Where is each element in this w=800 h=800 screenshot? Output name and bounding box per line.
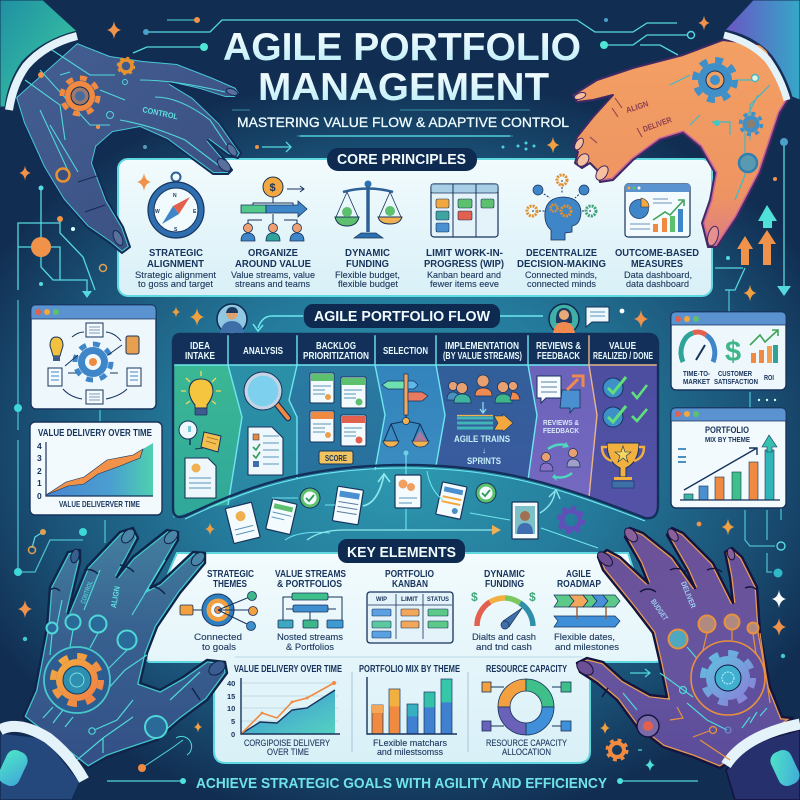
flow columns: [173, 334, 658, 518]
icon: organize around value: $: [270, 182, 276, 194]
text: limit wip: Kanban beard and: [427, 270, 501, 281]
circuit traces: [43, 560, 200, 760]
icons: reviews and feedback: REVIEWS &: [543, 418, 579, 427]
hand shape: [577, 528, 793, 768]
text: limit wip: LIMIT WORK-IN-: [426, 247, 503, 259]
icon: compass: S: [174, 227, 178, 233]
text: strategic alignment: STRATEGIC: [149, 247, 203, 259]
chart: resource capacity donut: [482, 663, 571, 758]
window: kpi metrics: MARKET: [683, 377, 710, 386]
window: value delivery chart: 4: [37, 441, 42, 451]
chart: resource capacity donut: RESOURCE CAPACITY: [486, 663, 567, 675]
hand outline: [23, 528, 227, 768]
icon: kanban board: [431, 184, 498, 237]
text: organize around value: ORGANIZE: [248, 247, 298, 259]
text: strategic alignment: [135, 247, 216, 290]
speech bubble: [586, 307, 624, 327]
icons: value realized: [602, 377, 647, 488]
text: decentralize: Connected minds,: [525, 270, 597, 281]
window: kpi metrics: TIME-TO-: [683, 369, 710, 378]
column header labels: PRIORITIZATION: [303, 350, 369, 362]
text: limit wip: fewer items eeve: [430, 279, 499, 290]
key element: value streams: Nosted streams: [277, 632, 343, 643]
teal rim: [23, 528, 227, 768]
text: dynamic funding: flexible budget: [338, 279, 398, 290]
key element: agile roadmap: ROADMAP: [557, 578, 601, 590]
key element: agile roadmap: [554, 568, 620, 653]
finger rings: [698, 614, 758, 634]
key element: dynamic funding gauge: FUNDING: [485, 578, 524, 590]
panel: core principles: [118, 159, 712, 296]
panel background: [147, 553, 660, 763]
text: decentralize: [517, 247, 606, 290]
text: organize around value: Value streams, value: [231, 270, 315, 281]
hand label: align: ALIGN: [109, 585, 122, 609]
circuit traces: [623, 647, 767, 730]
window: value delivery chart: 1: [37, 478, 42, 488]
icon: outcome dashboard: [625, 184, 690, 237]
heading: agile portfolio flow: [304, 304, 500, 328]
ring: index: [668, 630, 688, 648]
column header labels: INTAKE: [185, 350, 215, 362]
chart: resource capacity donut: RESOURCE CAPACITY: [486, 738, 568, 749]
icons: idea intake: [179, 371, 221, 498]
orange and violet rim: [577, 528, 793, 768]
hand: top right: [573, 0, 800, 247]
icons: analysis: [244, 372, 288, 475]
avatar: man: [217, 304, 247, 334]
text: decentralize: connected minds: [527, 279, 596, 290]
wrist ring: [739, 154, 757, 172]
window: portfolio mix: PORTFOLIO: [705, 425, 749, 436]
text: outcome-based: data dashboard: [626, 279, 689, 290]
window: kpi metrics: [671, 312, 786, 390]
icons: selection signpost and scales: [382, 374, 429, 530]
icons: backlog cards: [310, 373, 366, 464]
text: outcome-based: MEASURES: [631, 258, 683, 270]
hand shape: [573, 40, 790, 247]
key element: strategic themes: to goals: [202, 642, 236, 653]
key element: portfolio kanban: LIMIT: [401, 596, 418, 603]
text: outcome-based: OUTCOME-BASED: [615, 247, 699, 259]
hand: bottom right: [574, 526, 800, 800]
wrist ring: [56, 168, 70, 182]
icon: compass: W: [155, 209, 160, 215]
text: outcome-based: [615, 247, 699, 290]
hand label: deliver: DELIVER: [679, 580, 698, 610]
cuff: [0, 726, 84, 780]
panel background: [118, 159, 712, 296]
text: strategic alignment: to goss and target: [138, 279, 213, 290]
window: value flow diagram: [31, 305, 156, 409]
heading: core principles: CORE PRINCIPLES: [337, 152, 466, 168]
key element: portfolio kanban: KANBAN: [392, 578, 428, 590]
subtitle: MASTERING VALUE FLOW & ADAPTIVE CONTROL: [237, 114, 569, 130]
window: portfolio mix: MIX BY THEME: [705, 435, 750, 444]
title: AGILE PORTFOLIO: [223, 26, 581, 69]
icon: organize around value: [241, 177, 307, 241]
hand label: deliver: DELIVER: [642, 115, 673, 134]
icon: small blue gear: [740, 114, 762, 134]
heading: core principles: [327, 148, 477, 171]
chart: value delivery over time: CORGIPOISE DELIVERY: [244, 738, 331, 749]
text: organize around value: AROUND VALUE: [235, 258, 311, 270]
chart: value delivery over time: VALUE DELIVERY OVER TIME: [234, 663, 342, 675]
text: dynamic funding: DYNAMIC: [345, 247, 390, 259]
text: decentralize: DECISION-MAKING: [517, 258, 606, 270]
chart: value delivery over time: 5: [231, 717, 235, 726]
heading: key elements: KEY ELEMENTS: [347, 544, 456, 561]
hand outline: [15, 42, 241, 253]
key element: value streams: VALUE STREAMS: [275, 568, 346, 580]
avatar: woman: [549, 304, 579, 334]
icons: reviews and feedback: FEEDBACK: [543, 426, 580, 435]
sleeve: [726, 730, 800, 800]
hand outline: [577, 528, 793, 768]
title: [223, 26, 581, 109]
key element: dynamic funding gauge: $: [471, 590, 478, 604]
sleeve glow: [0, 747, 31, 789]
sleeve: [725, 0, 800, 100]
column header labels: VALUE: [609, 340, 636, 352]
hand: bottom left: [0, 527, 228, 800]
column header labels: SELECTION: [383, 345, 428, 357]
key element: strategic themes: THEMES: [213, 578, 247, 590]
circuit lines: top: [133, 17, 694, 152]
chart: portfolio mix by theme: FLexible matchars: [373, 738, 447, 749]
icon: blue gear: [691, 641, 765, 715]
column header labels: FEEDBACK: [537, 350, 580, 362]
teal rim: [15, 42, 241, 253]
key element: portfolio kanban: PORTFOLIO: [385, 568, 434, 580]
sleeve: [0, 733, 80, 800]
hand: top left: [0, 0, 241, 253]
column header labels: ANALYSIS: [243, 345, 283, 357]
icon: compass: N: [173, 193, 177, 199]
icon: orange gear: [62, 78, 98, 114]
heading: key elements: [338, 539, 465, 563]
flow dividers: [173, 334, 658, 505]
chart: resource capacity donut: ALLOCATION: [502, 747, 551, 758]
chart: value delivery over time: 40: [227, 679, 235, 688]
column header labels: REALIZED / DONE: [593, 350, 653, 362]
column header labels: (BY VALUE STREAMS): [443, 350, 522, 362]
icons: implementation team and trains: [447, 375, 520, 467]
flow connector arrows: [253, 316, 543, 331]
text: strategic alignment: Strategic alignment: [135, 270, 216, 281]
window: value delivery chart: 3: [37, 453, 42, 463]
hand label: CONTROL: [142, 105, 179, 121]
text: decentralize: DECENTRALIZE: [526, 247, 597, 259]
column header labels: [185, 340, 653, 362]
text: organize around value: [231, 247, 315, 290]
key element: portfolio kanban: STATUS: [427, 596, 450, 603]
chart: portfolio mix by theme: [359, 663, 460, 758]
text: limit wip: PROGRESS (WIP): [424, 258, 504, 270]
panel: key elements: [147, 553, 660, 763]
icon: small gear: [118, 58, 134, 74]
hand label: align: ALIGN: [625, 99, 650, 115]
heading: agile portfolio flow: AGILE PORTFOLIO FLOW: [314, 309, 490, 325]
key element: dynamic funding gauge: DYNAMIC: [484, 568, 525, 580]
key element: value streams: & PORTFOLIOS: [277, 578, 342, 590]
key element: value streams: & Portfolios: [286, 642, 334, 653]
key element: dynamic funding gauge: [471, 568, 536, 653]
column header labels: IDEA: [190, 340, 210, 352]
chart: value delivery over time: 0: [231, 730, 235, 739]
key element: agile roadmap: Flexible dates,: [554, 632, 615, 643]
key element: agile roadmap: AGILE: [566, 568, 591, 580]
text: limit wip: [424, 247, 504, 290]
chart: portfolio mix by theme: PORTFOLIO MIX BY THEME: [359, 663, 460, 675]
pink rim: [597, 97, 790, 247]
key element: value streams: [275, 568, 346, 653]
hand shape: [15, 42, 241, 253]
circuit traces: [25, 50, 230, 175]
window: kpi metrics: $: [725, 336, 741, 368]
icon: compass: E: [193, 209, 197, 215]
finger rings: [46, 614, 167, 738]
text: outcome-based: Data dashboard,: [624, 270, 692, 281]
icons: reviews and feedback: [537, 376, 583, 481]
key element: strategic themes: Connected: [194, 632, 242, 643]
cuff: [726, 724, 800, 765]
column header labels: BACKLOG: [316, 340, 356, 352]
text: dynamic funding: [335, 247, 400, 290]
window: kpi metrics: ROI: [764, 373, 774, 382]
text: strategic alignment: ALIGNMENT: [147, 258, 205, 270]
window: value delivery chart: VALUE DELIVERVER TIME: [59, 499, 140, 509]
tagline: ACHIEVE STRATEGIC GOALS WITH AGILITY AND EFFICIENCY: [196, 775, 607, 792]
title: MANAGEMENT: [258, 66, 549, 109]
column header labels: REVIEWS &: [536, 340, 581, 352]
window: value delivery chart: VALUE DELIVERY OVER TIME: [38, 428, 152, 439]
flow column headers: [173, 334, 658, 365]
key element: agile roadmap: and milestones: [555, 642, 619, 653]
circuit lines: sides: [14, 138, 791, 658]
icons: implementation team and trains: AGILE TRAINS: [454, 434, 510, 445]
key element: dynamic funding gauge: Dialts and cash: [472, 632, 536, 643]
window: portfolio mix: [671, 408, 786, 508]
flow outline: [173, 334, 658, 518]
hand label: control: CONTROL: [80, 580, 95, 605]
wrist node: [637, 715, 659, 737]
chart: value delivery over time: [227, 663, 342, 758]
chart: portfolio mix by theme: and milestsomss: [377, 747, 443, 758]
text: dynamic funding: FUNDING: [346, 258, 389, 270]
key element: portfolio kanban: [367, 568, 453, 643]
score badge: SCORE: [325, 453, 347, 463]
chart: value delivery over time: 10: [227, 704, 235, 713]
cuff: [9, 36, 77, 110]
icon: balance scale: [335, 180, 402, 238]
text: organize around value: streans and teams: [235, 279, 310, 290]
icons: implementation team and trains: SPRINTS: [467, 456, 501, 467]
flow documents under arc: [225, 471, 598, 548]
hand label: budget: BUDGET: [649, 597, 670, 622]
cuff: [724, 35, 787, 100]
icon: decentralized head: [527, 175, 596, 240]
key element: strategic themes: STRATEGIC: [207, 568, 254, 580]
circuit traces: [670, 75, 770, 200]
icon: blue gear: [695, 60, 735, 100]
sleeve glow: [767, 747, 800, 789]
chart: value delivery over time: 15: [227, 692, 235, 701]
flow arc highlight: [185, 468, 645, 521]
key element: strategic themes: [180, 568, 258, 653]
window: kpi metrics: SATISFACTION: [714, 377, 758, 386]
text: dynamic funding: Flexible budget,: [335, 270, 400, 281]
window: value delivery chart: 0: [37, 491, 42, 501]
hand shape: [23, 528, 227, 768]
sleeve: [0, 0, 77, 107]
hand outline: [573, 40, 790, 247]
window: kpi metrics: CUSTOMER: [718, 369, 752, 378]
key element: portfolio kanban: WIP: [376, 596, 388, 603]
window: value delivery chart: [30, 422, 162, 515]
panel: agile portfolio flow: [173, 334, 658, 530]
window: value delivery chart: 2: [37, 466, 42, 476]
side arrows: [737, 205, 777, 265]
chart: value delivery over time: OVER TIME: [267, 747, 309, 758]
key element: dynamic funding gauge: $: [529, 590, 536, 604]
bottom decorations: [138, 669, 650, 772]
key element: dynamic funding gauge: and tnd cash: [476, 642, 532, 653]
column header labels: IMPLEMENTATION: [445, 340, 519, 352]
icon: orange gear: [44, 647, 110, 713]
icon: compass: [137, 172, 204, 238]
icons: implementation team and trains: ↓: [482, 446, 486, 455]
